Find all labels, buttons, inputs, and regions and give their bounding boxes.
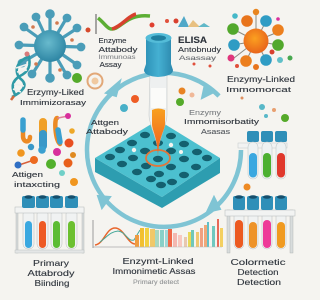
text: primary antibody binding: Biinding (34, 278, 70, 288)
panel: colorimetric detection rack (225, 195, 295, 253)
text: enzyme-linked immunosorbent: Enzymy-Linked (227, 75, 295, 84)
text: enzyme immunosorbent assays: Asasas (201, 129, 231, 136)
text: enzyme attabody immunoassay: Immunoas (98, 55, 136, 61)
circular process ring (87, 73, 241, 227)
text: ELISA antibody assay (178, 35, 222, 68)
text: antigen attabody (86, 118, 128, 136)
right top tubes (238, 131, 287, 179)
text: enzyme-linked immunometric assays: Primary detect (133, 279, 179, 286)
icon: antibody capsules (23, 113, 75, 150)
text: enzymy-linked immunoassay left (20, 88, 86, 107)
molecules left (14, 146, 78, 186)
text: enzyme immunosorbent assays (184, 110, 259, 136)
well plate (95, 120, 220, 208)
text: ELISA antibody assay: ELISA (178, 35, 207, 46)
orange dot (244, 184, 250, 190)
text: enzyme attabody immunoassay (98, 38, 138, 69)
text: colorimetric detection: Detection (238, 267, 279, 277)
text: ELISA antibody assay: Antobnudy (178, 47, 222, 54)
text: ELISA antibody assay: Asassay (179, 56, 216, 62)
text: antigen attabody: Attabody (86, 127, 128, 136)
text: enzyme-linked immunometric assays: Immonimetic Assas (112, 267, 196, 276)
scattered molecules right (176, 88, 289, 122)
text: enzyme-linked immunosorbent: Immomorcat (226, 85, 292, 94)
top decorative chart fragments (150, 16, 210, 28)
text: primary antibody binding (28, 258, 75, 288)
wave chart top (96, 14, 150, 34)
text: enzyme-linked immunometric assays (112, 257, 196, 286)
text: antigen interacting: intaxcting (14, 180, 60, 189)
text: primary antibody binding: Attabrody (28, 268, 75, 278)
icon: enzyme molecule cluster (227, 9, 292, 70)
text: colorimetric detection (230, 257, 287, 287)
text: enzyme attabody immunoassay: Assay (100, 62, 122, 69)
green and orange dots upper left (72, 28, 139, 112)
text: antigen interacting: Attigen (12, 170, 43, 179)
text: enzyme immunosorbent assays: Enzymy (189, 110, 222, 117)
text: enzyme-linked immunometric assays: Enzymt-Linked (122, 257, 194, 266)
text: enzyme attabody immunoassay: Enzyme (98, 38, 127, 45)
text: colorimetric detection: Colormetic (230, 257, 287, 267)
text: enzymy-linked immunoassay left: Immimizorasay (20, 98, 86, 107)
text: antigen interacting (12, 170, 60, 189)
panel: primary binding rack (15, 195, 84, 253)
chart: curves and bars (93, 219, 223, 248)
icon: virus (16, 11, 84, 81)
text: primary antibody binding: Primary (33, 258, 70, 268)
icon: DNA helix (11, 52, 30, 100)
text: antigen attabody: Attgen (91, 118, 119, 127)
test tube with cap (144, 33, 173, 156)
text: enzyme-linked immunosorbent (226, 75, 295, 94)
text: enzymy-linked immunoassay left: Erzymy-Liked (27, 88, 84, 97)
text: colorimetric detection: Detection (237, 277, 281, 287)
text: enzyme attabody immunoassay: Attabody (98, 47, 138, 54)
text: enzyme immunosorbent assays: Immomisorbatity (184, 117, 259, 126)
